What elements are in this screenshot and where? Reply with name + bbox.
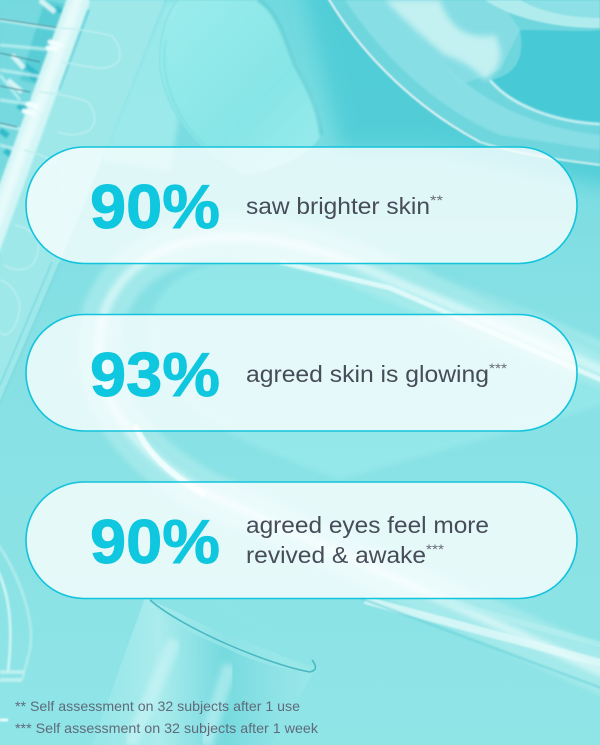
background: gel drop [160, 0, 321, 176]
footnote: after 1 use: ** Self assessment on 32 subjects after 1 use [15, 698, 300, 714]
footnote marker: *** [426, 541, 445, 557]
panel: agreed eyes feel more revived and awake [26, 482, 577, 598]
panel: saw brighter skin [26, 147, 577, 264]
label: saw brighter skin: saw brighter skin [246, 193, 430, 219]
footnote marker: ** [430, 192, 444, 208]
footnote marker: *** [489, 360, 508, 376]
background: glass beaker [92, 598, 316, 745]
stat: 93 percent glowing: 93% [90, 341, 220, 410]
stat: 90 percent brighter: 90% [90, 173, 220, 242]
footnotes [15, 698, 319, 736]
background: bent glass tube [99, 237, 600, 695]
label: agreed eyes feel more: agreed eyes feel more [246, 512, 489, 538]
footnote: after 1 week: *** Self assessment on 32 subjects after 1 week [15, 720, 319, 736]
background: spiral glass tube top left [0, 0, 165, 403]
background: glass bottle bottom left [0, 540, 31, 720]
label: revived and awake: revived & awake [246, 542, 426, 568]
panel: agreed skin is glowing [26, 314, 577, 431]
background: glass bowl top right [328, 0, 600, 165]
stat: 90 percent revived: 90% [90, 508, 220, 577]
label: agreed skin is glowing: agreed skin is glowing [246, 361, 489, 387]
